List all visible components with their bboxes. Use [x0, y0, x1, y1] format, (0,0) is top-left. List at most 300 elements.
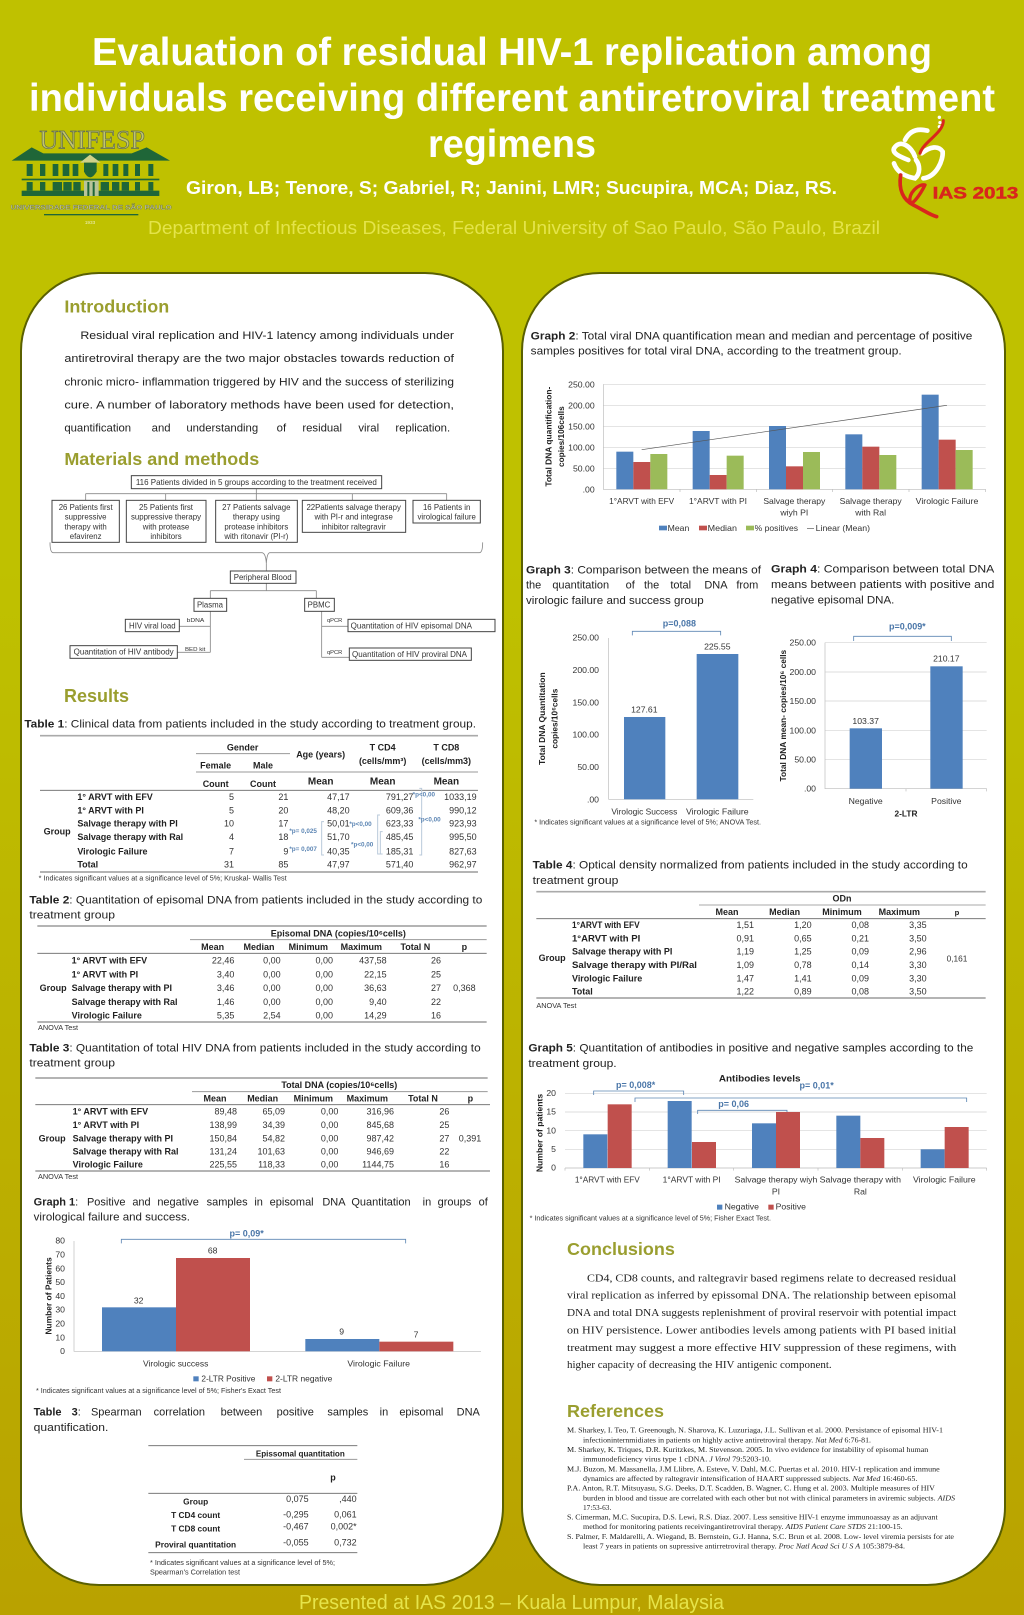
- table 1: 48,20: [327, 805, 350, 815]
- table 1: Count: [250, 779, 276, 789]
- text block: introduction: viral: [358, 423, 379, 435]
- method labels: qPCR: [327, 650, 342, 656]
- significance brackets: p= 0,06: [718, 1099, 749, 1109]
- significance bracket: [121, 1229, 406, 1243]
- graph 3 caption: the: [526, 580, 541, 592]
- text block: introduction: cure. A number of laboratory methods have been used for detection,: [64, 399, 454, 411]
- table 3: 0,00: [321, 1147, 338, 1157]
- graph 4: bar chart: Positive: [931, 796, 962, 806]
- table 2: 1,46: [217, 997, 234, 1007]
- graph 4: bar chart: 210.17: [933, 654, 960, 664]
- table 2: 9,40: [369, 997, 387, 1007]
- text block: introduction: [64, 330, 455, 435]
- legend: [193, 1374, 333, 1384]
- table 1 footnote: * Indicates significant values at a significance level of 5%; Kruskal- Wallis Test: [39, 874, 287, 883]
- title: [29, 31, 995, 166]
- graph 1: bar chart: 40: [55, 1291, 65, 1301]
- table 2: 0,00: [263, 997, 281, 1007]
- table 4: 1,47: [736, 973, 754, 983]
- table 1: 995,50: [449, 832, 477, 842]
- legend: 2-LTR negative: [275, 1374, 333, 1384]
- box: group 1: efavirenz: [70, 532, 102, 541]
- footer: Presented at IAS 2013 – Kuala Lumpur, Malaysia: [299, 1592, 725, 1614]
- significance bracket: [854, 622, 951, 641]
- graph 4 caption: means between patients with positive and: [771, 579, 994, 591]
- table 1: (cells/mm³): [359, 756, 406, 766]
- graph 3 caption: of: [626, 580, 636, 592]
- reference list: 17:53-63.: [583, 1503, 611, 1512]
- graph 1: bar chart: 32: [134, 1295, 144, 1305]
- graph 3: bar chart: 100.00: [573, 730, 599, 740]
- text block: conclusions: higher capacity of decreasing the HIV antigenic component.: [567, 1360, 832, 1371]
- graph 3 caption: quantitation: [552, 580, 609, 592]
- Spearman caption: correlation: [154, 1407, 205, 1419]
- graph 2: bar chart: 150.00: [568, 421, 595, 431]
- graph 2: bar chart: 1°ARVT with EFV: [609, 496, 674, 506]
- text block: introduction: residual: [302, 423, 342, 435]
- table 2: 0,00: [315, 1011, 333, 1021]
- significance brackets: p= 0,01*: [800, 1081, 834, 1091]
- table 2: 0,00: [315, 997, 333, 1007]
- table 2: Median: [244, 942, 274, 952]
- table 4: 0,65: [794, 933, 812, 943]
- trend line: [642, 405, 947, 450]
- table 3 caption: treatment group: [29, 1058, 115, 1070]
- heading: Conclusions: Conclusions: [567, 1239, 675, 1259]
- logo: UNIFESP: UNIVERSIDADE FEDERAL DE SÃO PAULO: [11, 202, 172, 211]
- graph 2: bar chart: Salvage therapy: [840, 496, 902, 506]
- graph 2: bar chart: 200.00: [568, 400, 595, 410]
- table 2: 2,54: [263, 1011, 281, 1021]
- graph 1 caption: of: [479, 1196, 489, 1208]
- Spearman caption: episomal: [399, 1407, 443, 1419]
- box: episomal: Quantitation of HIV episomal DNA: [351, 621, 473, 630]
- graph 3: bar chart: .00: [587, 794, 599, 804]
- panel: right: [522, 273, 1005, 1585]
- graph 1 caption: in: [423, 1196, 431, 1208]
- graph 4 caption: negative episomal DNA.: [771, 594, 894, 606]
- graph 1: bar chart: 80: [55, 1236, 65, 1246]
- table 1: 185,31: [386, 847, 413, 857]
- Spearman table: 0,061: [334, 1510, 357, 1520]
- reference list: burden in blood and tissue are correlated with each other but not with clinical parameters in aviremic subjects. AIDS: [583, 1493, 955, 1502]
- table 4 caption: [533, 860, 968, 887]
- box: group 2: [126, 500, 206, 542]
- table 3: 987,42: [367, 1133, 394, 1143]
- graph 1 caption: samples: [207, 1196, 248, 1208]
- table 4: Maximum: [879, 907, 920, 917]
- box: group 3: 27 Patients salvage: [222, 503, 290, 512]
- graph 5: bar chart: 20: [546, 1088, 556, 1098]
- box: group 4: inhibitor raltegravir: [321, 522, 386, 531]
- table 2: Episomal DNA (copies/10⁶cells): [271, 928, 406, 938]
- graph 5: bar chart: [534, 1073, 987, 1212]
- graph 1: bar chart: 50: [55, 1277, 65, 1287]
- text block: conclusions: DNA and total DNA suggests replenishment of proviral reservoir with potential impact: [567, 1308, 956, 1319]
- graph 2 caption: [531, 330, 972, 358]
- table 2: 22: [431, 997, 441, 1007]
- Spearman table: Proviral quantitation: [155, 1540, 236, 1550]
- graph 2 caption: samples positives for total viral DNA, according to the treatment group.: [531, 346, 902, 358]
- affiliation: Department of Infectious Diseases, Federal University of Sao Paulo, São Paulo, Brazil: [148, 217, 880, 238]
- table 4: 1,41: [794, 973, 812, 983]
- table 1: Salvage therapy with PI: [77, 819, 178, 829]
- table 1: 1° ARVT with PI: [77, 805, 144, 815]
- table 4: 1°ARVT with EFV: [572, 920, 640, 930]
- Spearman table: -0,055: [283, 1537, 309, 1547]
- graph 1: bar chart: [44, 1229, 481, 1384]
- table 3: 225,55: [210, 1160, 237, 1170]
- text block: conclusions: on HIV persistence. Lower antibodies levels among patients with PI based initial: [567, 1325, 956, 1336]
- significance bracket: p=0,009*: [889, 622, 926, 632]
- logo: UNIFESP: UNIFESP: [39, 125, 145, 154]
- table 1: 47,17: [327, 792, 350, 802]
- graph 1 caption: DNA: [322, 1196, 346, 1208]
- table 4: 1,19: [736, 947, 754, 957]
- box: group 4: [302, 500, 406, 532]
- text block: conclusions: treatment may suggest a more effective HIV suppression of these regimens, with: [567, 1343, 957, 1354]
- heading: Materials and methods: Materials and methods: [64, 449, 259, 469]
- graph 3 caption: DNA: [704, 580, 728, 592]
- table 3: 138,99: [210, 1120, 237, 1130]
- table 4: 0,08: [851, 986, 869, 996]
- table 1: 609,36: [386, 805, 413, 815]
- reference list: M.J. Buzon, M. Massanella, J.M Llibre, A. Esteve, V. Dahl, M.C. Puertas et al. 2010. HIV-1 replication and immune: [567, 1464, 940, 1473]
- graph 3 caption: total: [670, 580, 691, 592]
- table 1: Age (years): [296, 749, 345, 759]
- graph 1 caption: [34, 1196, 489, 1224]
- table 2 caption: Table 2: Quantitation of episomal DNA from patients included in the study according to: [29, 894, 482, 906]
- box: group 1: therapy with: [65, 522, 107, 531]
- graph 2: bar chart: Total DNA quantification-: [544, 387, 554, 487]
- table 3: 0,00: [321, 1133, 338, 1143]
- graph 3 caption: from: [736, 580, 758, 592]
- table 1: Virologic Failure: [77, 847, 148, 857]
- graph 3: bar chart: Virologic Failure: [686, 806, 749, 816]
- table 4: 3,35: [909, 920, 927, 930]
- table 4: Total: [572, 986, 593, 996]
- box: group 2: suppressive therapy: [131, 513, 201, 522]
- graph 5: bar chart: 1°ARVT with EFV: [575, 1175, 640, 1185]
- table 1: 47,97: [327, 860, 350, 870]
- Spearman table: -0,295: [283, 1510, 309, 1520]
- table 1: 571,40: [386, 860, 413, 870]
- text block: conclusions: viral replication as inferred by epissomal DNA. The relationship between episomal: [567, 1291, 956, 1302]
- table 4: Median: [769, 907, 800, 917]
- graph 2: bar chart: Salvage therapy: [763, 496, 826, 506]
- table 2: 14,29: [364, 1011, 387, 1021]
- graph 1 caption: and: [132, 1196, 151, 1208]
- table 4: 1,51: [736, 920, 754, 930]
- table 3: Salvage therapy with PI: [73, 1133, 173, 1143]
- graph 1: bar chart: 9: [339, 1327, 344, 1337]
- table 2: Mean: [201, 942, 224, 952]
- table 2: 16: [431, 1011, 441, 1021]
- text block: conclusions: [567, 1273, 957, 1371]
- table 3: p: [468, 1093, 474, 1103]
- Spearman caption: :: [78, 1407, 81, 1419]
- table 1: *p<0,00: [418, 817, 441, 824]
- box: group 4: with PI-r and integrase: [313, 513, 393, 522]
- box: episomal: [348, 619, 495, 632]
- Spearman caption: samples: [327, 1407, 369, 1419]
- box: patients: 116 Patients divided in 5 groups according to the treatment received: [136, 478, 377, 487]
- table 1: 791,27: [386, 792, 413, 802]
- title: individuals receiving different antiretroviral treatment: [29, 77, 995, 120]
- box: peripheral blood: [230, 571, 296, 583]
- Spearman caption: Spearman: [91, 1407, 142, 1419]
- table 1: 40,35: [327, 847, 350, 857]
- graph 1: bar chart: 20: [55, 1318, 65, 1328]
- box: group 1: suppressive: [65, 513, 107, 522]
- legend: % positives: [755, 523, 799, 533]
- Spearman table: p: [330, 1473, 336, 1483]
- graph 1: bar chart: 70: [55, 1250, 65, 1260]
- table 1: Mean: [370, 777, 395, 788]
- table 2: 1° ARVT with PI: [72, 969, 138, 979]
- graph 1: bar chart: 30: [55, 1305, 65, 1315]
- text block: introduction: understanding: [186, 423, 258, 435]
- graph 1: bar chart: 10: [55, 1332, 65, 1342]
- reference list: M. Sharkey, I. Teo, T. Greenough, N. Sharova, K. Luzuriaga, J.L. Sullivan et al. 2000. Persistance of episomal HIV-1: [567, 1426, 943, 1435]
- table 3: 1° ARVT with EFV: [73, 1107, 148, 1117]
- reference list: least 7 years in patients on supressive antirretroviral therapy. Proc Natl Acad Sci U S A 105:3879-84.: [583, 1541, 905, 1550]
- graph 3: bar chart: 200.00: [573, 665, 599, 675]
- graph 4 caption: [771, 564, 995, 606]
- graph 5: bar chart: Ral: [854, 1186, 867, 1196]
- table 1: 10: [224, 819, 234, 829]
- table 4: 0,91: [736, 933, 754, 943]
- box: patients: [131, 476, 382, 489]
- title: regimens: [428, 123, 596, 166]
- table 4: 0,09: [851, 947, 869, 957]
- table 1: 50,01: [327, 819, 350, 829]
- graph 1 caption: in: [254, 1196, 263, 1208]
- table 1: 4: [229, 832, 234, 842]
- table 3: 150,84: [210, 1133, 237, 1143]
- table 1 caption: Table 1: Clinical data from patients included in the study according to treatment group.: [24, 718, 476, 730]
- box: group 3: protease inhibitors: [224, 522, 288, 531]
- Spearman caption: Table: [34, 1407, 62, 1419]
- table 1: 18: [278, 832, 288, 842]
- table 4 caption: Table 4: Optical density normalized from patients included in the study according to: [533, 860, 968, 872]
- Spearman table: [148, 1446, 357, 1553]
- authors: Giron, LB; Tenore, S; Gabriel, R; Janini, LMR; Sucupira, MCA; Diaz, RS.: [186, 178, 837, 198]
- table 3: 25: [439, 1120, 449, 1130]
- section: graphs 2 to 4: [526, 330, 995, 826]
- table 3: 0,00: [321, 1120, 338, 1130]
- table 1: 20: [278, 805, 288, 815]
- box: plasma: [194, 598, 227, 611]
- table 3: 0,391: [459, 1133, 481, 1143]
- table 1: 31: [224, 860, 234, 870]
- table 3: Group: [39, 1133, 66, 1143]
- box: PBMC: [305, 598, 334, 611]
- reference list: dynamics are affected by raltegravir intensification of HAART suppressed subjects. Nat Med 16:460-65.: [583, 1474, 918, 1483]
- table 4: 1,22: [736, 986, 754, 996]
- table 2: 5,35: [217, 1011, 234, 1021]
- table 1: Mean: [308, 777, 333, 788]
- graph 5: bar chart: 1°ARVT with PI: [663, 1175, 721, 1185]
- table 2: 26: [431, 956, 441, 966]
- graph 5: bar chart: Number of patients: [534, 1094, 544, 1172]
- box: group 5: virological failure: [418, 513, 476, 522]
- table 2: Virologic Failure: [72, 1011, 142, 1021]
- text block: introduction: antiretroviral therapy are the two major obstacles towards reduction of: [64, 353, 455, 365]
- table 4: 0,14: [851, 960, 869, 970]
- table 2 caption: treatment group: [29, 910, 115, 922]
- table 4 caption: treatment group: [533, 875, 618, 887]
- table 1: 990,12: [449, 805, 477, 815]
- table 1: [40, 736, 478, 872]
- reference list: M. Sharkey, K. Triques, D.R. Kuritzkes, M. Stevenson. 2005. In vivo evidence for instability of episomal human: [567, 1445, 929, 1454]
- table 3: 101,63: [258, 1147, 285, 1157]
- graph 5: bar chart: 15: [546, 1107, 556, 1117]
- table 4: Minimum: [822, 907, 862, 917]
- table 3: 316,96: [367, 1107, 394, 1117]
- legend: Positive: [776, 1202, 806, 1212]
- table 1: 827,63: [449, 847, 477, 857]
- table 1: *p<0,00: [351, 841, 374, 848]
- box: proviral: [349, 648, 471, 660]
- graph 1 caption: virological failure and success.: [34, 1212, 190, 1224]
- graph 1: bar chart: Virologic Failure: [347, 1358, 410, 1368]
- graph 5: bar chart: 0: [551, 1163, 556, 1173]
- panel: left: [21, 273, 503, 1585]
- table 2: 0,00: [315, 956, 333, 966]
- heading: References: References: [567, 1401, 664, 1421]
- Spearman caption: 3: [72, 1407, 78, 1419]
- Spearman table: Epissomal quantitation: [256, 1448, 345, 1458]
- graph 5 caption: Graph 5: Quantitation of antibodies in positive and negative samples according to the: [528, 1043, 973, 1055]
- legend: Linear (Mean): [816, 523, 870, 533]
- table 1: Male: [253, 761, 273, 771]
- table 1: T CD8: [433, 742, 459, 752]
- table 1: 51,70: [327, 832, 350, 842]
- table 4: ODn: [833, 893, 851, 903]
- table 1: (cells/mm3): [422, 756, 471, 766]
- table 4: 3,30: [909, 960, 927, 970]
- graph 4: bar chart: 100.00: [790, 725, 816, 735]
- table 4: 0,89: [794, 986, 812, 996]
- table 2: 0,368: [453, 983, 476, 993]
- table 1: 5: [229, 805, 234, 815]
- significance bracket: p=0,088: [663, 618, 696, 628]
- method labels: qPCR: [327, 618, 342, 624]
- table 1: 9: [283, 847, 288, 857]
- box: group 3: [216, 500, 297, 542]
- table 4: 1,09: [736, 960, 754, 970]
- table 3 footnote: ANOVA Test: [38, 1172, 78, 1181]
- graph 3 caption: virologic failure and success group: [526, 595, 704, 607]
- Spearman table: Group: [183, 1496, 208, 1506]
- table 4: 1,25: [794, 947, 812, 957]
- table 3: 34,39: [263, 1120, 285, 1130]
- reference list: immunodeficiency virus type 1 cDNA. J Virol 79:5203-10.: [583, 1455, 771, 1464]
- Spearman footnote: [150, 1558, 335, 1577]
- logo: IAS 2013: [894, 116, 1018, 217]
- table 3: 65,09: [263, 1107, 285, 1117]
- reference list: infectioninternmidiates in patients on highly active antiretroviral therapy. Nat Med 6:76-81.: [583, 1435, 871, 1444]
- table 3: 946,69: [367, 1147, 394, 1157]
- graph 2: bar chart: copies/106cells: [556, 406, 566, 467]
- table 3 caption: [29, 1042, 481, 1070]
- table 3: 0,00: [321, 1107, 338, 1117]
- table 1: *p<0,00: [413, 792, 435, 799]
- box: peripheral blood: Peripheral Blood: [234, 573, 292, 582]
- logo: UNIFESP: 1933: [85, 220, 96, 225]
- table 1: 17: [278, 819, 288, 829]
- significance brackets: p= 0,008*: [616, 1080, 656, 1090]
- graph 3: bar chart: 50.00: [577, 762, 599, 772]
- logo: IAS 2013: IAS 2013: [933, 184, 1018, 202]
- graph 1: bar chart: 60: [55, 1263, 65, 1273]
- table 3: 0,00: [321, 1160, 338, 1170]
- table 3: 27: [439, 1133, 449, 1143]
- table 4: [536, 892, 986, 998]
- table 2: 437,58: [359, 956, 387, 966]
- graph 4: bar chart: 250.00: [790, 638, 816, 648]
- table 2: Maximum: [341, 942, 382, 952]
- table 1: T CD4: [370, 742, 396, 752]
- significance bracket: [632, 618, 721, 635]
- graph 3: bar chart: 127.61: [631, 705, 658, 715]
- box: viral load: HIV viral load: [129, 621, 176, 630]
- table 3: 1144,75: [362, 1160, 394, 1170]
- box: group 5: [413, 500, 480, 523]
- table 4: 0,21: [851, 933, 869, 943]
- Spearman footnote: * Indicates significant values at a significance level of 5%;: [150, 1558, 335, 1567]
- table 3 caption: Table 3: Quantitation of total HIV DNA from patients included in the study according to: [29, 1042, 481, 1054]
- table 2: [37, 926, 487, 1022]
- graph 4: bar chart: 2-LTR: [895, 809, 917, 819]
- table 2: 0,00: [263, 983, 281, 993]
- table 4: Salvage therapy with PI: [572, 947, 672, 957]
- table 4: p: [955, 908, 960, 917]
- table 4: Salvage therapy with PI/Ral: [572, 960, 697, 970]
- graph 4 caption: Graph 4: Comparison between total DNA: [771, 564, 995, 576]
- table 2 footnote: ANOVA Test: [38, 1023, 78, 1032]
- reference list: S. Cimerman, M.C. Sucupira, D.S. Lewi, R.S. Diaz. 2007. Less sensitive HIV-1 enzyme immunoassay as an adjuvant: [567, 1513, 938, 1522]
- table 3: 131,24: [210, 1147, 237, 1157]
- graph 3: bar chart: copies/10⁶cells: [549, 688, 559, 749]
- title: Evaluation of residual HIV-1 replication among: [92, 31, 932, 74]
- graph 5: bar chart: 10: [546, 1125, 556, 1135]
- table 3: Salvage therapy with Ral: [73, 1147, 179, 1157]
- method labels: BED kit: [185, 647, 206, 653]
- table 2: 3,40: [217, 969, 234, 979]
- box: viral load: [125, 619, 179, 632]
- graph 5: bar chart: Salvage therapy wiyh: [735, 1175, 818, 1185]
- graph 5 caption: treatment group.: [528, 1058, 617, 1070]
- heading: Results: Results: [64, 686, 129, 706]
- legend: [717, 1202, 806, 1212]
- table 3: 89,48: [215, 1107, 237, 1117]
- table 4: Mean: [716, 907, 738, 917]
- box: group 2: with protease: [142, 522, 189, 531]
- graph 5 caption: [528, 1043, 973, 1070]
- graph 3 caption: [526, 564, 762, 607]
- Spearman caption: quantification.: [34, 1422, 108, 1434]
- text block: introduction: Residual viral replication and HIV-1 latency among individuals under: [80, 330, 454, 342]
- table 4: 1°ARVT with PI: [572, 933, 640, 943]
- graph 1 footnote: * Indicates significant values at a significance level of 5%; Fisher's Exact Test: [36, 1386, 281, 1395]
- table 3: Median: [247, 1093, 278, 1103]
- section: table 4 and graph 5: [528, 860, 987, 1223]
- table 1: 5: [229, 792, 234, 802]
- table 2: Salvage therapy with PI: [72, 983, 172, 993]
- table 4: 0,08: [851, 920, 869, 930]
